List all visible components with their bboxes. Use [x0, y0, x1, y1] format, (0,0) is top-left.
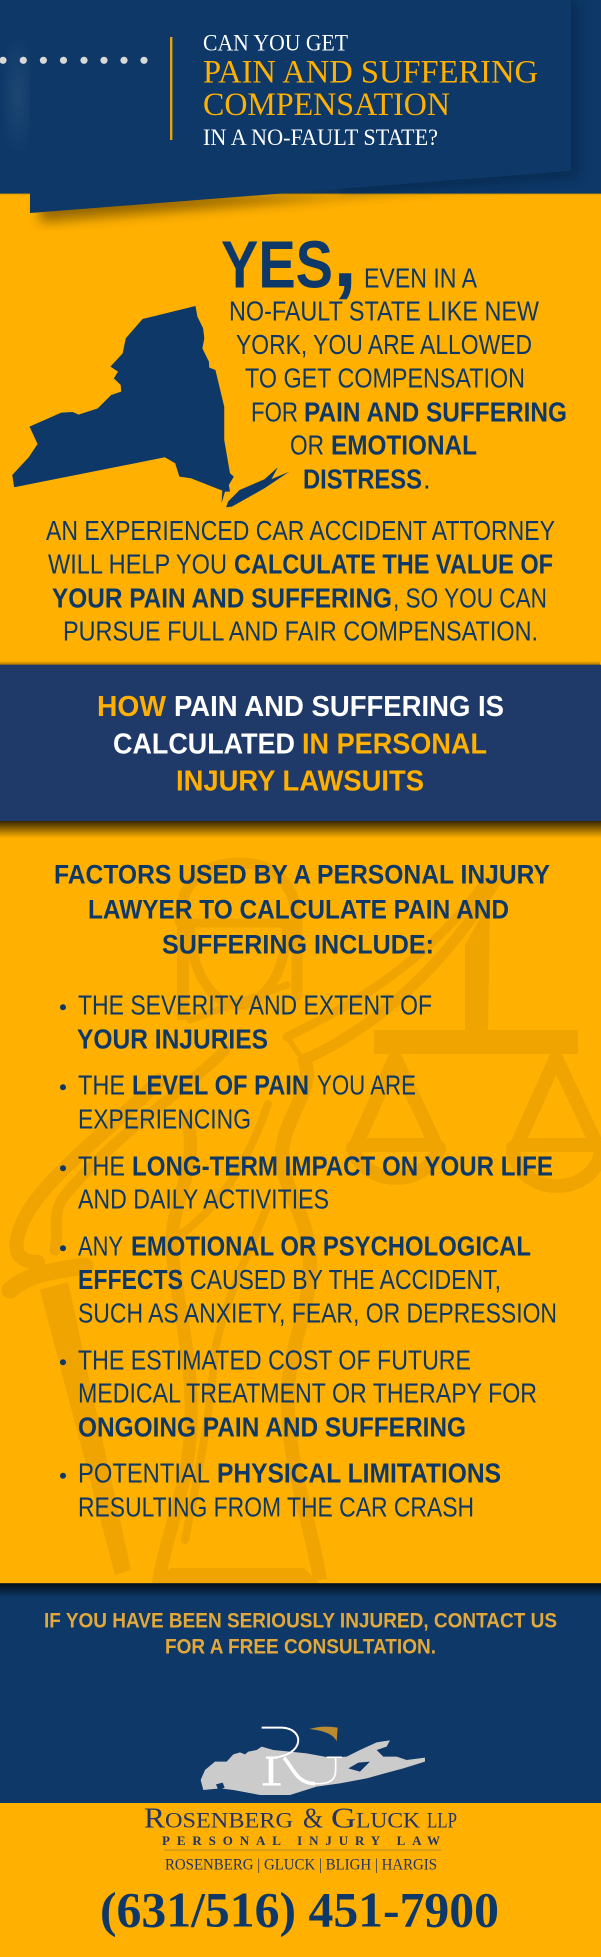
text block: yes intro: TO GET COMPENSATION	[245, 363, 525, 394]
text block: yes intro: .	[423, 463, 431, 494]
item: level of pain	[60, 1069, 416, 1134]
text block: attorney paragraph	[46, 515, 555, 647]
title: PAIN AND SUFFERING	[203, 55, 538, 91]
list: factors	[60, 989, 557, 1523]
title	[203, 31, 538, 150]
item: emotional effects	[60, 1231, 557, 1328]
item: emotional effects: EFFECTS	[78, 1264, 183, 1295]
text block: attorney paragraph: , SO YOU CAN	[393, 582, 547, 613]
logo: Rosenberg and Gluck wordmark	[144, 1802, 457, 1873]
decorative dots	[0, 57, 148, 64]
panel: contact footer	[0, 1583, 601, 1803]
logo: Rosenberg and Gluck wordmark: PERSONAL INJURY LAW	[162, 1833, 440, 1848]
item: emotional effects: EMOTIONAL OR PSYCHOLOGICAL	[131, 1231, 531, 1262]
text block: yes intro: EMOTIONAL	[331, 430, 477, 461]
logo: Rosenberg and Gluck wordmark: R	[144, 1802, 166, 1834]
logo: Rosenberg and Gluck wordmark: LLP	[427, 1807, 457, 1832]
text block: attorney paragraph: CALCULATE THE VALUE OF	[234, 548, 553, 579]
item: severity	[60, 989, 432, 1054]
heading: factors	[54, 859, 550, 959]
call to action: IF YOU HAVE BEEN SERIOUSLY INJURED, CONTACT US	[44, 1610, 557, 1633]
icon: Long Island logo	[201, 1727, 425, 1795]
banner heading: PAIN AND SUFFERING IS	[174, 691, 504, 723]
item: physical limitations: POTENTIAL	[78, 1458, 210, 1489]
item: long-term impact	[60, 1151, 553, 1214]
text block: yes intro: ,	[333, 210, 357, 305]
item: future cost: ONGOING PAIN AND SUFFERING	[78, 1412, 466, 1443]
text block: yes intro: OR	[290, 430, 324, 461]
item: long-term impact: THE	[78, 1151, 125, 1182]
item: emotional effects: ANY	[78, 1231, 123, 1262]
phone number: (631/516) 451-7900	[100, 1882, 499, 1938]
watermark: lady justice with scales	[10, 863, 601, 1585]
banner heading: CALCULATED	[113, 728, 295, 760]
text block: yes intro	[221, 210, 567, 494]
item: physical limitations: PHYSICAL LIMITATIONS	[217, 1458, 501, 1489]
item: level of pain: THE	[78, 1069, 125, 1100]
text block: yes intro: EVEN IN A	[364, 262, 477, 293]
item: long-term impact: LONG-TERM IMPACT ON YOUR LIFE	[132, 1151, 553, 1182]
text block: yes intro: NO-FAULT STATE LIKE NEW	[229, 296, 539, 327]
title: COMPENSATION	[203, 87, 450, 123]
heading: factors: SUFFERING INCLUDE:	[162, 929, 434, 959]
item: emotional effects: CAUSED BY THE ACCIDENT,	[190, 1264, 501, 1295]
item: severity: YOUR INJURIES	[77, 1023, 268, 1054]
panel: header	[0, 0, 601, 222]
item: severity: THE SEVERITY AND EXTENT OF	[78, 989, 432, 1020]
item: future cost	[60, 1344, 537, 1443]
text block: yes intro: YES	[221, 228, 333, 303]
item: future cost: THE ESTIMATED COST OF FUTURE	[78, 1344, 471, 1375]
logo: Rosenberg and Gluck wordmark: G	[331, 1802, 356, 1834]
text block: yes intro: DISTRESS	[303, 463, 422, 494]
item: level of pain: YOU ARE	[317, 1069, 416, 1100]
title: CAN YOU GET	[203, 31, 348, 56]
text block: yes intro: YORK, YOU ARE ALLOWED	[236, 329, 532, 360]
call to action: FOR A FREE CONSULTATION.	[165, 1636, 436, 1659]
logo: Rosenberg and Gluck wordmark: LUCK	[356, 1807, 420, 1832]
banner heading: HOW	[97, 691, 167, 723]
logo: Rosenberg and Gluck wordmark: OSENBERG	[165, 1807, 293, 1832]
banner heading	[97, 691, 504, 798]
item: physical limitations: RESULTING FROM THE CAR CRASH	[78, 1492, 474, 1523]
item: physical limitations	[60, 1458, 501, 1523]
title: IN A NO-FAULT STATE?	[203, 125, 438, 150]
text block: yes intro: PAIN AND SUFFERING	[304, 396, 567, 427]
item: level of pain: LEVEL OF PAIN	[132, 1069, 309, 1100]
logo: Rosenberg and Gluck wordmark: ROSENBERG | GLUCK | BLIGH | HARGIS	[165, 1856, 437, 1873]
panel: how it is calculated banner	[0, 661, 601, 838]
logo: Rosenberg and Gluck wordmark: &	[303, 1803, 323, 1834]
banner ribbon	[30, 0, 571, 213]
text block: yes intro: FOR	[251, 396, 298, 427]
banner heading: IN PERSONAL	[302, 728, 487, 760]
item: level of pain: EXPERIENCING	[78, 1103, 251, 1134]
heading: factors: FACTORS USED BY A PERSONAL INJURY	[54, 859, 550, 889]
item: long-term impact: AND DAILY ACTIVITIES	[78, 1183, 329, 1214]
heading: factors: LAWYER TO CALCULATE PAIN AND	[88, 894, 509, 924]
banner heading: INJURY LAWSUITS	[176, 766, 424, 798]
text block: attorney paragraph: WILL HELP YOU	[48, 548, 227, 579]
text block: attorney paragraph: YOUR PAIN AND SUFFERING	[52, 582, 392, 613]
icon: New York state map	[12, 306, 289, 507]
call to action	[44, 1610, 557, 1659]
